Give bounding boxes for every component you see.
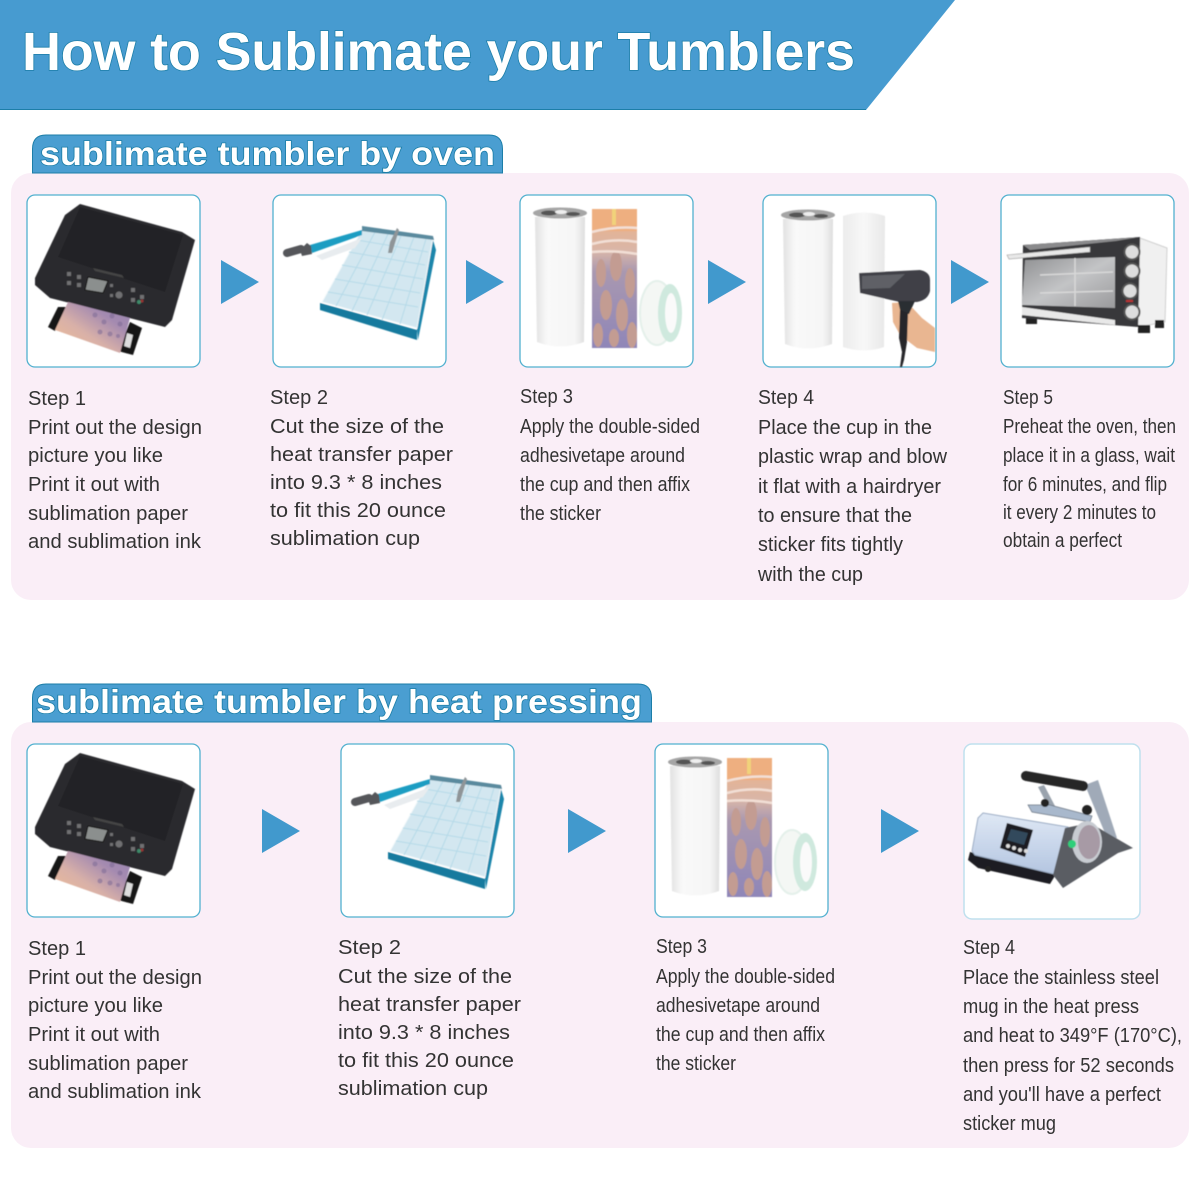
step 1 text: Step 1 xyxy=(28,388,86,410)
step 2 text: Cut the size of the xyxy=(338,966,512,988)
step 1 text: Print it out with xyxy=(28,1024,160,1046)
step 4 text: and heat to 349°F (170°C), xyxy=(963,1025,1182,1047)
step 1 text: sublimation paper xyxy=(28,1053,188,1075)
heading tab: oven: sublimate tumbler by oven xyxy=(40,135,495,172)
step 5 text: for 6 minutes, and flip xyxy=(1003,474,1167,496)
step 3 text: the cup and then affix xyxy=(520,474,690,496)
step 5 card: toaster oven xyxy=(1001,195,1174,367)
step 4 text: sticker mug xyxy=(963,1113,1056,1135)
step 3 text: Step 3 xyxy=(520,386,573,408)
panel: sublimate tumbler by oven xyxy=(11,135,1189,600)
step 4 text xyxy=(963,937,1182,1135)
step 3 text: adhesivetape around xyxy=(656,995,820,1017)
step 4 text: then press for 52 seconds xyxy=(963,1055,1174,1077)
step 1 text: picture you like xyxy=(28,995,163,1017)
step 3 text xyxy=(520,386,700,525)
step 4 text: to ensure that the xyxy=(758,505,912,527)
step 5 text: Step 5 xyxy=(1003,387,1053,409)
step 3 text: Apply the double-sided xyxy=(520,416,700,438)
title banner: How to Sublimate your Tumblers xyxy=(22,22,855,82)
step 3 card: tumbler, sticker and tape xyxy=(655,744,828,917)
step 5 text xyxy=(1003,387,1176,552)
step 2 text: Cut the size of the xyxy=(270,416,444,438)
step 3 text: Apply the double-sided xyxy=(656,966,835,988)
step 1 text xyxy=(28,938,202,1103)
step 2 text: Step 2 xyxy=(270,387,328,409)
step 3 text: the sticker xyxy=(656,1053,736,1075)
arrow xyxy=(708,260,746,304)
step 2 text: into 9.3 * 8 inches xyxy=(270,472,442,494)
step 1 text: Print it out with xyxy=(28,474,160,496)
step 4 text: it flat with a hairdryer xyxy=(758,476,941,498)
step 5 text: it every 2 minutes to xyxy=(1003,502,1156,524)
step 4 text: and you'll have a perfect xyxy=(963,1084,1161,1106)
step 4 text: sticker fits tightly xyxy=(758,534,903,556)
step 5 text: Preheat the oven, then xyxy=(1003,416,1176,438)
step 3 text: Step 3 xyxy=(656,936,707,958)
step 2 text: sublimation cup xyxy=(270,528,420,550)
step 3 text xyxy=(656,936,835,1075)
arrow xyxy=(262,809,300,853)
step 4 text: Place the cup in the xyxy=(758,417,932,439)
step 1 text: sublimation paper xyxy=(28,503,188,525)
arrow xyxy=(568,809,606,853)
arrow xyxy=(881,809,919,853)
step 1 text: and sublimation ink xyxy=(28,531,202,553)
step 4 text: mug in the heat press xyxy=(963,996,1139,1018)
step 3 text: adhesivetape around xyxy=(520,445,685,467)
step 2 text: Step 2 xyxy=(338,937,401,959)
step 1 card: printer xyxy=(27,744,200,917)
step 2 text: to fit this 20 ounce xyxy=(338,1050,514,1072)
step 2 text: into 9.3 * 8 inches xyxy=(338,1022,510,1044)
step 3 card: tumbler, sticker and tape xyxy=(520,195,693,367)
step 1 text xyxy=(28,388,202,553)
step 3 text: the cup and then affix xyxy=(656,1024,825,1046)
step 2 text: heat transfer paper xyxy=(338,994,521,1016)
step 2 card: paper cutter xyxy=(341,744,514,917)
step 2 card: paper cutter xyxy=(273,195,446,367)
arrow xyxy=(951,260,989,304)
step 1 text: Step 1 xyxy=(28,938,86,960)
step 5 text: obtain a perfect xyxy=(1003,530,1122,552)
step 2 text: heat transfer paper xyxy=(270,444,453,466)
step 4 text xyxy=(757,387,948,586)
step 4 text: with the cup xyxy=(757,564,863,586)
step 5 text: place it in a glass, wait xyxy=(1003,445,1175,467)
step 2 text xyxy=(270,387,453,550)
step 2 text: sublimation cup xyxy=(338,1078,488,1100)
step 4 text: Step 4 xyxy=(963,937,1015,959)
step 4 text: Step 4 xyxy=(758,387,814,409)
step 1 text: and sublimation ink xyxy=(28,1081,202,1103)
step 4 text: Place the stainless steel xyxy=(963,967,1159,989)
step 1 text: Print out the design xyxy=(28,417,202,439)
step 4 card: tumbler, plastic wrap and hairdryer xyxy=(763,195,936,367)
step 2 text: to fit this 20 ounce xyxy=(270,500,446,522)
arrow xyxy=(221,260,259,304)
step 4 text: plastic wrap and blow xyxy=(758,446,948,468)
step 1 card: printer xyxy=(27,195,200,367)
panel: sublimate tumbler by heat pressing xyxy=(11,683,1189,1148)
title banner xyxy=(0,0,955,110)
step 1 text: picture you like xyxy=(28,445,163,467)
step 1 text: Print out the design xyxy=(28,967,202,989)
arrow xyxy=(466,260,504,304)
step 4 card: mug heat press xyxy=(964,744,1140,919)
step 2 text xyxy=(338,937,521,1100)
step 3 text: the sticker xyxy=(520,503,601,525)
heading tab: heat pressing: sublimate tumbler by heat pressing xyxy=(36,683,642,720)
